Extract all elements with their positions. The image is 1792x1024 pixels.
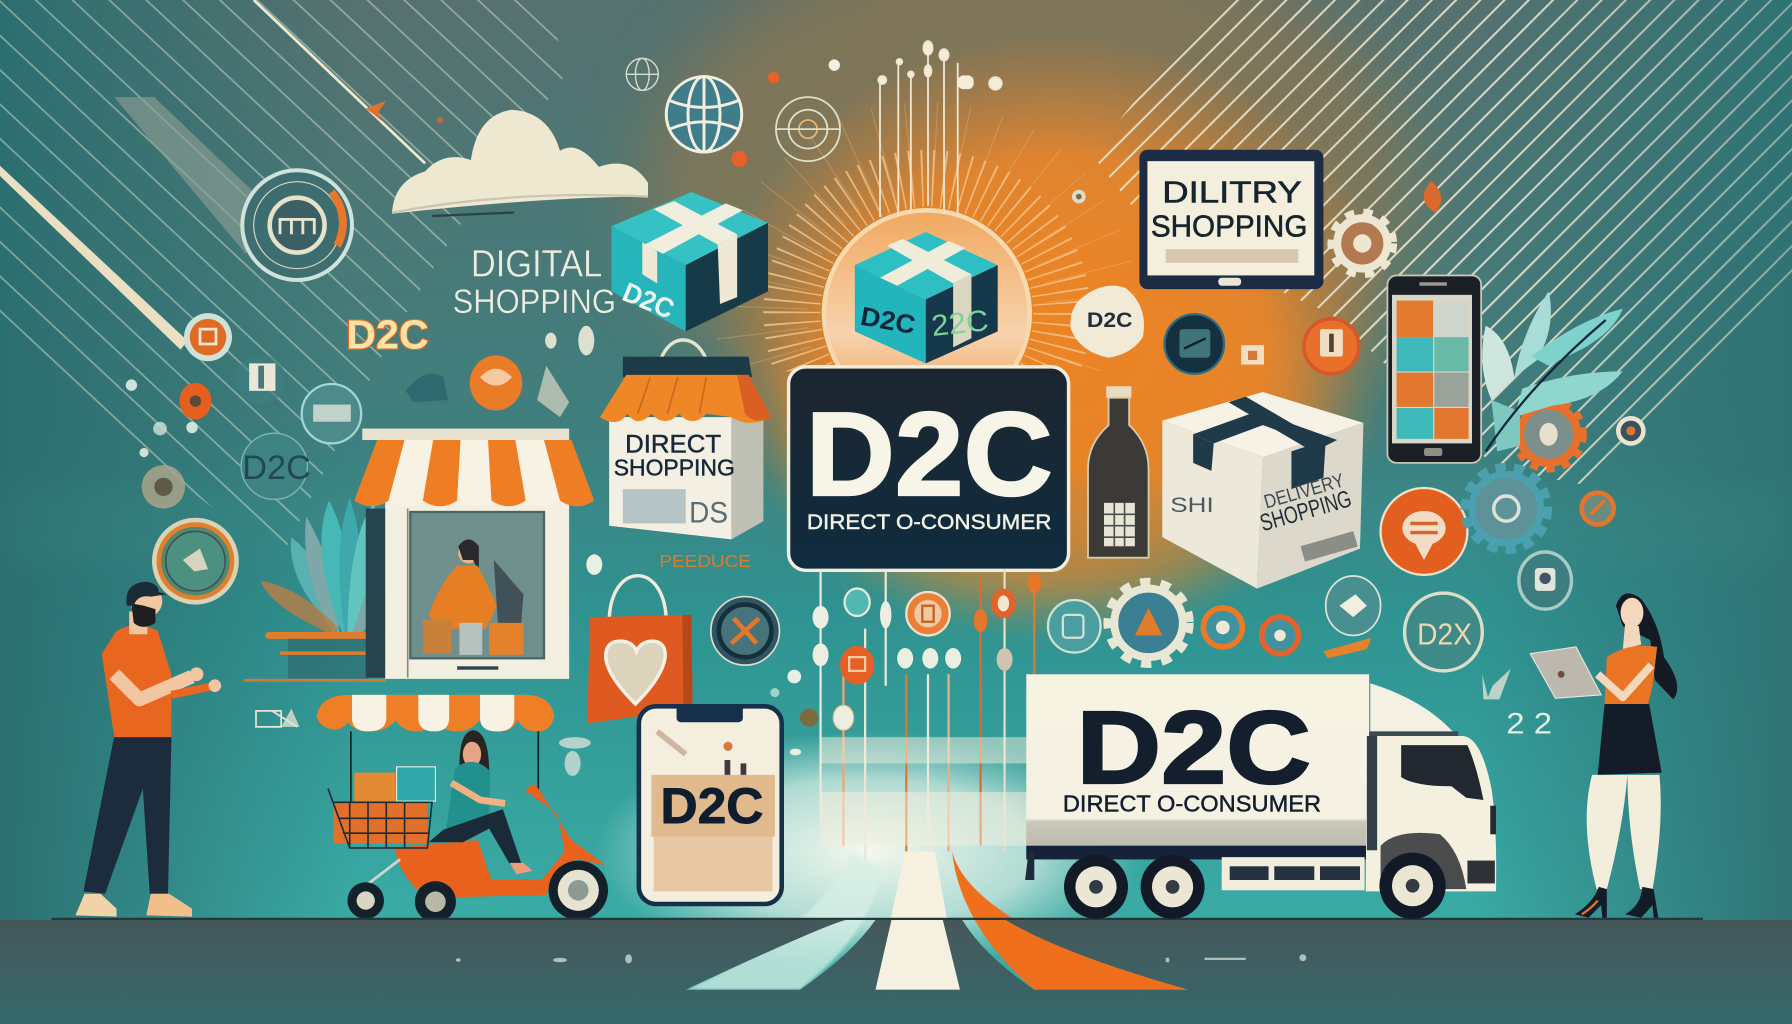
small orange dots [366,59,840,167]
icon: small brown badge [142,465,185,509]
shopping bag storefront: SHOPPING [614,454,735,480]
shopping bag storefront: DIRECT [625,431,721,459]
main D2C sign: D2C [806,388,1053,521]
produce label: PEEDUCE [659,551,751,571]
icon: faint D2C circle: D2C [242,449,311,487]
teal gear [1465,467,1547,550]
road swooshes [686,851,1189,990]
shopping bag storefront: DS [689,496,728,529]
icon: orange oval [179,383,211,419]
shopping bag storefront [600,340,771,539]
delivery truck [1025,674,1496,919]
cardboard box [1162,392,1363,589]
central teal box: 22C [930,304,990,343]
diagonal line pattern right [1091,0,1792,486]
gear near tablet [1331,213,1393,274]
small line icons [256,711,297,727]
shopping cart [328,789,432,848]
diagonal line pattern left [0,0,566,560]
small floating numerals: 2 2 [1506,708,1552,741]
D2C blob badge: D2C [1087,307,1133,332]
orange gear [1514,400,1583,469]
cardboard box: SHOPPING [1257,485,1355,537]
small glasses icon [559,737,591,776]
top connector lines with dots [878,41,1002,217]
plant [243,498,389,682]
central teal box [855,232,998,363]
cloud [392,110,648,216]
tablet digital shopping: SHOPPING [1151,209,1307,244]
truck cargo box: D2C [1077,690,1311,805]
man in orange shirt [75,582,221,917]
central sun and box [822,208,1032,366]
scooter wheels [347,861,608,922]
digital shopping heading: SHOPPING [453,283,616,321]
orange chat badge [1381,488,1467,575]
bottle [1088,386,1149,558]
central teal box: D2C [858,301,918,340]
digital shopping heading: DIGITAL [471,243,602,285]
main D2C sign [789,367,1069,570]
icon: orange ring [1262,617,1298,654]
dark wax seal [1165,314,1224,374]
icon: large ring badge [242,170,352,280]
truck chassis [1026,846,1375,859]
small orange leaf icon [1424,181,1441,213]
small arrow marks [281,669,1511,727]
icon: pin bubble [1323,576,1381,658]
icon: orange ring medallion [152,518,239,605]
orange ring small [1582,493,1614,525]
small pin icons [586,554,801,697]
scooter body [394,785,606,897]
D2C smartphone: D2C [661,777,763,834]
teal shield badge [1519,552,1571,609]
orange D2C label: D2C [346,312,429,358]
ground floor [0,919,1792,1024]
market awning [317,695,554,806]
D2C smartphone [639,706,782,904]
truck cargo box [1026,674,1369,846]
icon: orange oval badge [991,589,1016,618]
orange badge [1304,319,1359,374]
horizontal light bands [821,737,1029,846]
shopper in window [423,539,523,655]
icon: white panel [235,354,286,405]
icon: ring [776,97,840,161]
icon: faint D2C circle [241,433,311,499]
truck cab [1366,683,1496,891]
striped awning [354,440,594,506]
leaf [1482,291,1623,451]
truck cargo box: DIRECT O-CONSUMER [1063,790,1321,816]
icon: orange ring [1203,608,1242,647]
small cream icon [1241,345,1264,365]
icon: seal with X [711,597,779,665]
cardboard box: SHI [1170,492,1214,517]
digital shopping heading [453,243,616,321]
rider [429,730,533,874]
icon: D2X badge: D2X [1417,617,1472,652]
D2C blob badge [1070,286,1144,358]
connector lines under sign [821,569,1034,891]
icon: cream gear [1107,582,1190,664]
teal delivery box with D2C: D2C [618,276,679,325]
icon: small faint globe [626,58,658,90]
teal delivery box with D2C [611,192,768,331]
truck wheels [1064,853,1446,919]
connector nodes [790,573,1041,755]
icon: small dots [126,379,198,457]
smartphone with tiles [1387,275,1481,463]
cardboard box: DELIVERY [1262,470,1347,513]
woman with laptop [1530,593,1677,918]
icon: orange coin [184,313,232,361]
icon: teal badge [1048,600,1101,653]
main D2C sign: DIRECT O-CONSUMER [807,509,1051,534]
heart shopping bag [587,576,693,723]
icon: globe [666,77,742,152]
scooter with rider and cart [317,695,608,922]
tablet digital shopping: DILITRY [1162,174,1302,209]
icons group near orange badge [406,326,594,417]
tablet digital shopping [1139,150,1323,289]
small pin icon [1072,190,1086,203]
icon: orange coin below sign [906,592,950,635]
floor specks [456,954,1306,963]
sun rays behind central box [761,147,1093,479]
storefront with awning [354,429,594,679]
icon: teal badge [302,384,361,443]
small badge right [1616,416,1646,446]
icon: D2X badge [1405,593,1482,671]
